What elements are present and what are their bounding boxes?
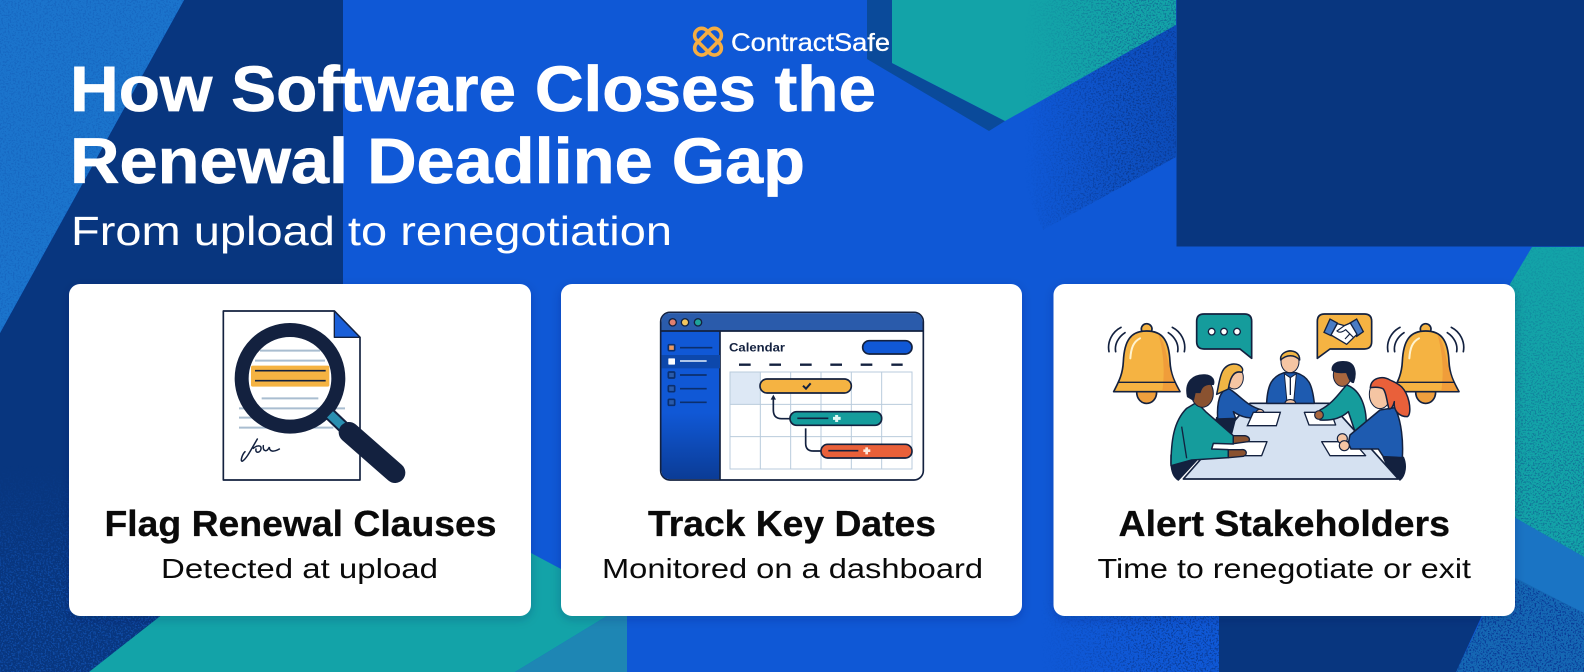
panel: alert stakeholders [1054, 284, 1515, 616]
heading: Flag Renewal Clauses [104, 503, 496, 544]
icon: left bell [1114, 324, 1180, 403]
icon: speech bubble [1197, 314, 1252, 358]
title [70, 53, 876, 197]
heading: Track Key Dates [648, 503, 936, 544]
icon: calendar dashboard window [661, 312, 923, 480]
icon: bell sound waves [1109, 327, 1464, 352]
title: Renewal Deadline Gap [70, 125, 805, 197]
person: right rear [1304, 362, 1366, 432]
person: centre [1267, 351, 1314, 403]
person: left rear [1213, 364, 1264, 433]
paper [1247, 412, 1280, 426]
caption: Detected at upload [161, 553, 438, 584]
title: How Software Closes the [70, 53, 876, 125]
icon: magnifier over contract [223, 311, 395, 480]
logo wordmark: ContractSafe [731, 29, 890, 57]
icon: calendar dashboard window: Calendar [729, 341, 786, 354]
icon: handshake bubble [1317, 314, 1372, 358]
icon: right bell [1393, 324, 1459, 403]
panel: flag renewal clauses [69, 284, 531, 616]
icon: team meeting with bells [1109, 314, 1464, 480]
caption: Monitored on a dashboard [602, 553, 983, 584]
caption: Time to renegotiate or exit [1098, 553, 1471, 584]
person: left front [1171, 375, 1267, 480]
table [1183, 403, 1398, 479]
panel: track key dates [561, 284, 1022, 616]
icon: logo mark [692, 25, 724, 58]
subtitle: From upload to renegotiation [71, 208, 672, 254]
heading: Alert Stakeholders [1118, 503, 1450, 544]
logo: ContractSafe [692, 25, 890, 58]
person: right front [1322, 378, 1410, 480]
